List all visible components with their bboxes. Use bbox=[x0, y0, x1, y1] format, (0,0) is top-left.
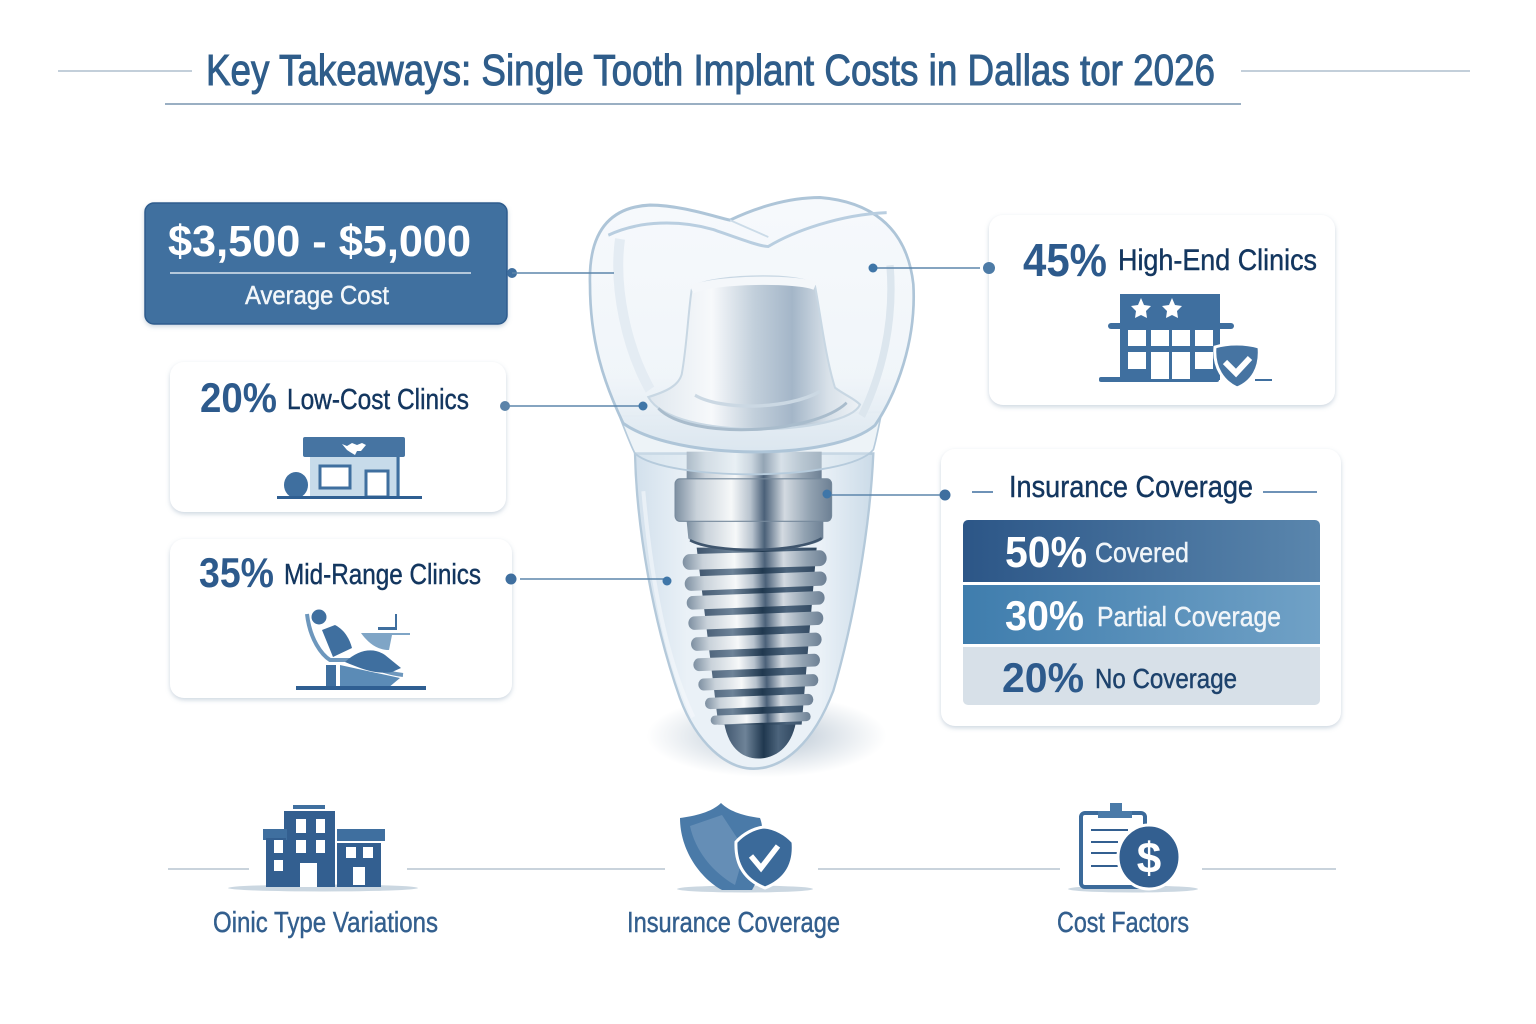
tooth implant illustration bbox=[590, 198, 914, 777]
bar: 50% covered bbox=[963, 520, 1320, 582]
label: cost factors: Cost Factors bbox=[1057, 907, 1189, 939]
panel: high-end clinics bbox=[989, 215, 1335, 405]
title: Key Takeaways: Single Tooth Implant Costs in Dallas tor 2026 bbox=[206, 46, 1215, 95]
average cost panel: $3,500 - $5,000 bbox=[168, 217, 471, 266]
crown bbox=[590, 198, 914, 452]
icon: hotel-style clinic with shield bbox=[1099, 294, 1272, 388]
implant threads bbox=[675, 452, 832, 759]
panel: high-end clinics: High-End Clinics bbox=[1118, 244, 1317, 277]
icon: clinic buildings bbox=[228, 805, 418, 892]
label: clinic type variations: Oinic Type Variations bbox=[213, 907, 438, 939]
connector: average cost bbox=[507, 268, 614, 278]
connector: insurance coverage bbox=[822, 490, 950, 500]
connector: high-end clinics bbox=[868, 262, 995, 274]
bar: 20% no coverage: 20% bbox=[1002, 654, 1084, 701]
abutment bbox=[648, 276, 860, 429]
icon: clipboard with dollar bbox=[1068, 803, 1198, 892]
bar: 50% covered: Covered bbox=[1095, 537, 1189, 568]
average cost panel bbox=[145, 203, 507, 324]
average cost panel: Average Cost bbox=[245, 280, 390, 310]
bar: 50% covered: 50% bbox=[1005, 528, 1087, 577]
icon: dental chair bbox=[296, 610, 426, 690]
bar: 30% partial coverage: 30% bbox=[1005, 592, 1084, 639]
panel: low-cost clinics: Low-Cost Clinics bbox=[287, 384, 469, 416]
bar: 30% partial coverage bbox=[963, 585, 1320, 644]
bar: 30% partial coverage: Partial Coverage bbox=[1097, 601, 1281, 632]
ground shadow bbox=[647, 695, 887, 777]
panel: low-cost clinics bbox=[170, 362, 506, 512]
bar: 20% no coverage bbox=[963, 647, 1320, 705]
bar: 20% no coverage: No Coverage bbox=[1095, 663, 1237, 694]
icon: insurance shield bbox=[677, 803, 813, 892]
crown base band bbox=[619, 412, 882, 474]
connector: low-cost clinics bbox=[500, 401, 648, 411]
panel: mid-range clinics: Mid-Range Clinics bbox=[284, 559, 481, 591]
panel: mid-range clinics: 35% bbox=[199, 549, 274, 596]
panel: insurance coverage: Insurance Coverage bbox=[1009, 469, 1253, 504]
panel: insurance coverage bbox=[941, 449, 1341, 726]
panel: mid-range clinics bbox=[170, 539, 512, 698]
panel: high-end clinics: 45% bbox=[1023, 234, 1107, 286]
bottom dividers bbox=[168, 868, 1336, 870]
icon: small clinic bbox=[277, 437, 422, 499]
connector: mid-range clinics bbox=[506, 574, 672, 586]
label: insurance coverage: Insurance Coverage bbox=[627, 907, 840, 939]
root bbox=[635, 454, 873, 769]
panel: low-cost clinics: 20% bbox=[200, 374, 277, 421]
icon: clipboard with dollar: $ bbox=[1137, 834, 1161, 883]
